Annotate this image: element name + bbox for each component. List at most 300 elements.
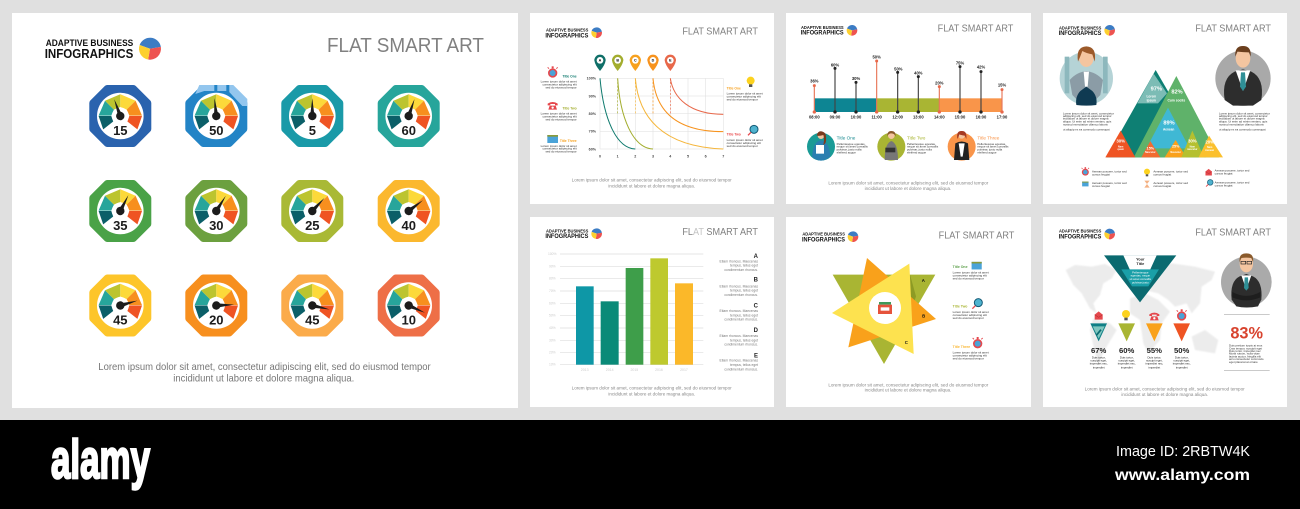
pyramid chart: Nascetur [1170, 151, 1181, 154]
person: man with glasses [1221, 253, 1272, 307]
timeline chart: 14:00 [934, 114, 945, 119]
footer text: Lorem ipsum dolor sit amet, consectetur adipiscing elit, sed do eiusmod tempor [98, 361, 431, 373]
funnel title: Title [1136, 262, 1144, 266]
legend [1082, 167, 1250, 188]
side text: Title Three [953, 345, 970, 349]
legend: Aenean posuere, tortor sed [1092, 181, 1127, 185]
left text block: Lorem ipsum dolor sit amet, consectetur [1063, 111, 1114, 115]
pyramid chart: quam [1117, 148, 1125, 151]
timeline chart: 50% [873, 55, 881, 60]
left text blocks [541, 75, 577, 154]
person captions: eleifend augue [977, 150, 997, 154]
gauge 10 [381, 278, 436, 333]
pyramid chart: Nascetur [1145, 151, 1156, 154]
logo: INFOGRAPHICS [545, 33, 588, 39]
heading: FLAT SMART ART [682, 26, 758, 37]
line chart: 70% [589, 130, 597, 134]
pyramid chart: Aenean [1163, 127, 1174, 131]
timeline chart: 12:00 [892, 114, 904, 119]
metric 67%: suscipit eget, [1090, 358, 1107, 362]
metric 55%: imperdiet [1149, 365, 1160, 369]
logo [801, 25, 857, 37]
logo: INFOGRAPHICS [545, 234, 588, 240]
gauge 50 [189, 85, 247, 144]
line chart: 5 [687, 154, 689, 158]
pyramid chart: 20% [1205, 140, 1214, 145]
logo: ADAPTIVE BUSINESS [801, 25, 844, 30]
timeline chart [809, 55, 1008, 119]
icon: bulb [747, 77, 755, 87]
right text block: Lorem ipsum dolor sit amet, consectetur [1219, 111, 1270, 115]
world map [1066, 263, 1218, 363]
side text: consectetur adipiscing elit [953, 354, 987, 358]
right text block: adipiscing elit, sed do eiusmod tempor [1219, 114, 1268, 118]
funnel title: pulvinar justo [1132, 280, 1149, 284]
logo: INFOGRAPHICS [45, 47, 133, 61]
pyramid chart: 82% [1171, 90, 1183, 96]
side text: consectetur adipiscing elit [953, 274, 987, 278]
icon: bulb [1122, 310, 1130, 320]
legend text: B [754, 278, 759, 284]
side text: sed do eiusmod tempor [953, 277, 984, 281]
gauge 5 [285, 88, 340, 144]
heading: FLAT SMART ART [939, 230, 1014, 241]
legend text: D [754, 328, 759, 334]
legend text: condimentum rhoncus. [724, 268, 758, 272]
gauge 20 [189, 278, 244, 333]
funnel title [1104, 255, 1176, 302]
pin C: C [634, 59, 637, 63]
star diagram [832, 258, 936, 364]
metric 67%: Duis tortor, [1092, 355, 1106, 359]
bar chart: 100% [548, 252, 557, 256]
metric 83%: Duis tortor, imperdiet nec [1229, 349, 1261, 353]
legend text: Etiam rhoncus. Maecenas [720, 259, 758, 263]
metric 83% [1224, 315, 1270, 370]
footer text: Lorem ipsum dolor sit amet, consectetur adipiscing elit, sed do eiusmod tempor [1085, 386, 1245, 392]
icon: magnifier [972, 299, 982, 309]
logo: INFOGRAPHICS [1059, 234, 1101, 240]
gauge 35 [93, 184, 148, 238]
metric 83%: Morbi rutrum, nulla vitae [1229, 352, 1260, 356]
metric 60%: Duis tortor, [1120, 355, 1134, 359]
person three [948, 131, 976, 161]
bar chart: 10% [549, 363, 556, 367]
funnel title: sit amet convallis [1130, 277, 1152, 281]
legend text: A [754, 254, 759, 260]
legend text: condimentum rhoncus. [724, 293, 758, 297]
image id: Image ID: 2RBTW4K [1116, 443, 1250, 460]
legend: Aenean posuere, tortor sed [1092, 169, 1127, 173]
metric 67%: imperdiet nec, [1090, 361, 1108, 365]
gauge 60: 60 [401, 123, 416, 138]
gauge 45 orange: 45 [305, 312, 320, 328]
pin E [665, 55, 676, 71]
side text: sed do eiusmod tempor [953, 357, 984, 361]
funnel title: Your [1136, 257, 1145, 261]
metric 67%: 67% [1091, 346, 1107, 355]
right text blocks: consectetur adipiscing elit [727, 95, 761, 99]
timeline chart: 30% [852, 76, 860, 81]
footer text [572, 386, 732, 398]
pyramid chart: Nam [1190, 145, 1196, 148]
pyramid chart: 25% [1172, 145, 1180, 149]
person captions: pulvinar, justo nulla [977, 148, 1003, 152]
footer text [828, 180, 989, 192]
legend text [720, 254, 759, 371]
bar chart: 2014 [606, 368, 614, 372]
bar chart: 60% [549, 301, 556, 305]
metric 55%: suscipit eget, [1146, 358, 1163, 362]
legend text: E [754, 354, 758, 360]
metric 83%: lacinia auctor, fringilla elit [1229, 354, 1261, 358]
logo [1059, 229, 1115, 240]
bar chart: 2013 [581, 368, 589, 372]
legend text: tempus, tellus eget [730, 363, 758, 367]
bar chart: 80% [549, 277, 556, 281]
pyramid chart: nascetur [1187, 148, 1198, 151]
bar chart: 2015 [630, 368, 638, 372]
person captions: Pellentesque egestas, [907, 142, 936, 146]
right text block [1219, 111, 1270, 131]
pyramid chart: Nam [1207, 146, 1213, 149]
panel: world map percentages [1043, 217, 1287, 407]
person captions [837, 135, 1009, 154]
gauge 40 [381, 184, 436, 238]
pyramid chart: 15% [1147, 146, 1155, 150]
person captions: Pellentesque egestas, [977, 142, 1006, 146]
panel: pyramids [1043, 13, 1287, 204]
person captions: Title One [837, 135, 856, 140]
metric 50% [1173, 323, 1191, 369]
left text blocks: Title Two [563, 107, 577, 111]
person captions: Title Three [977, 135, 1000, 140]
panel: bar chart [530, 217, 774, 407]
metric 50%: imperdiet nec, [1173, 361, 1191, 365]
footer text: Lorem ipsum dolor sit amet, consectetur adipiscing elit, sed do eiusmod tempor [572, 178, 732, 184]
gauge 25: 25 [305, 218, 320, 233]
left text blocks: consectetur adipiscing elit [542, 147, 577, 151]
star diagram: A [922, 278, 926, 283]
icon: window [547, 135, 558, 143]
bar chart: 2017 [680, 368, 688, 372]
side text: consectetur adipiscing elit [953, 313, 987, 317]
pin E: E [669, 59, 672, 63]
metric 55%: 55% [1147, 346, 1162, 355]
funnel title: Pellentesque [1132, 270, 1149, 274]
icon: stopwatch [973, 337, 983, 348]
pyramid chart: Lorem [1147, 94, 1156, 98]
line chart: 4 [669, 154, 672, 158]
person captions: Pellentesque egestas, [837, 142, 866, 146]
left text blocks: sed do eiusmod tempor [545, 85, 577, 89]
gauge 30 [189, 184, 244, 238]
timeline chart: 13:00 [913, 114, 924, 119]
funnel title: egestas, neque [1131, 274, 1150, 278]
timeline chart: 08:00 [809, 114, 820, 119]
legend: cursus feugiat [1215, 183, 1233, 187]
left text block [1063, 111, 1114, 131]
right text blocks: sed do eiusmod tempor [727, 144, 758, 148]
metric 60%: 60% [1119, 346, 1135, 355]
pin A: A [599, 59, 602, 63]
bar chart: 30% [549, 338, 556, 342]
panel: timeline [786, 13, 1031, 204]
line chart: 80% [589, 112, 597, 116]
metric 83%: eget placerat at ornare [1229, 360, 1258, 364]
person captions: neque sit amet convallis [907, 145, 939, 149]
side text: sed do eiusmod tempor [953, 316, 984, 320]
side text: Title Two [953, 304, 967, 308]
right text block: aliqua. Ut enim ad minim veniam, quis [1219, 120, 1268, 124]
timeline chart: 42% [977, 65, 985, 70]
metric 83%: arcu consectetur commodo [1229, 357, 1264, 361]
logo: ADAPTIVE BUSINESS [46, 38, 133, 49]
icon: phone [1149, 313, 1159, 320]
metric 50%: 50% [1174, 346, 1190, 355]
gauge 25 [285, 184, 340, 238]
line chart: 7 [722, 154, 724, 158]
legend: cursus feugiat [1153, 172, 1171, 176]
pyramid chart: 89% [1163, 121, 1175, 127]
metric 67%: imperdiet [1093, 365, 1105, 369]
person captions: pulvinar, justo nulla [837, 148, 862, 152]
footer text: incididunt ut labore et dolore magna aliqua. [865, 388, 951, 394]
right text blocks: Title Two [727, 133, 741, 137]
footer text [1085, 386, 1245, 398]
pyramid chart: ipsum [1147, 99, 1156, 103]
footer text [572, 178, 732, 189]
side text: Title One [953, 265, 968, 269]
legend: cursus feugiat [1153, 184, 1171, 188]
bar chart: 70% [549, 289, 556, 293]
legend text: condimentum rhoncus. [724, 367, 758, 371]
legend text: C [754, 303, 759, 309]
logo: INFOGRAPHICS [1059, 31, 1101, 37]
line chart: 0 [599, 154, 601, 158]
logo: ADAPTIVE BUSINESS [1059, 25, 1101, 30]
heading: FLAT SMART ART [1195, 227, 1271, 238]
person one [807, 131, 835, 161]
timeline chart: 75% [956, 60, 964, 65]
legend: cursus feugiat [1215, 172, 1233, 176]
gauge 35: 35 [113, 218, 128, 233]
side text: Lorem ipsum dolor sit amet [953, 351, 989, 355]
pyramid chart: 30% [1188, 138, 1197, 143]
legend text: Etiam rhoncus. Maecenas [720, 284, 758, 288]
metric 50%: imperdiet [1176, 365, 1188, 369]
timeline chart: 10:00 [851, 114, 862, 119]
legend: Aenean posuere, tortor sed [1153, 169, 1188, 173]
logo [1059, 25, 1115, 37]
person captions: neque sit amet convallis [977, 145, 1009, 149]
footer text: Lorem ipsum dolor sit amet, consectetur adipiscing elit, sed do eiusmod tempor [828, 180, 989, 186]
legend: Aenean posuere, tortor sed [1215, 180, 1250, 184]
gauge 45 yellow [93, 278, 148, 333]
logo [802, 231, 858, 243]
line chart: 100% [587, 77, 597, 81]
legend text: tempus, tellus eget [730, 289, 758, 293]
heading: FLAT SMART ART [1195, 24, 1271, 35]
left text blocks: sed do eiusmod tempor [545, 117, 577, 121]
icon: stopwatch [1177, 309, 1187, 321]
metric 60% [1118, 323, 1136, 369]
icon: magnifier [748, 125, 758, 135]
bar chart: 40% [549, 326, 556, 330]
icon: stopwatch [548, 66, 558, 78]
timeline chart: 11:00 [871, 114, 883, 119]
side text: Lorem ipsum dolor sit amet [953, 310, 989, 314]
pyramid chart: Cum sociis [1167, 99, 1185, 103]
logo [545, 228, 602, 240]
line chart: 3 [652, 154, 654, 158]
right text blocks: consectetur adipiscing elit [727, 141, 761, 145]
pyramid chart: 30% [1116, 138, 1125, 143]
icon: cash register [878, 302, 892, 314]
right text blocks: Lorem ipsum dolor sit amet [727, 138, 763, 142]
legend: cursus feugiat [1092, 184, 1110, 188]
left text block: ut aliquip ex ea commodo consequat [1063, 127, 1110, 131]
left text blocks: Lorem ipsum dolor sit amet [541, 80, 577, 84]
person captions: neque sit amet convallis [837, 145, 868, 149]
metric 50%: suscipit eget, [1173, 358, 1190, 362]
logo: ADAPTIVE BUSINESS [546, 228, 588, 233]
panel: decay curves [530, 13, 774, 204]
gauge 60 [381, 88, 436, 144]
gauge 30: 30 [209, 218, 224, 233]
person captions: Title Two [907, 135, 926, 140]
pin C [630, 55, 641, 71]
legend: Aenean posuere, tortor sed [1215, 169, 1250, 173]
pin B [612, 55, 623, 71]
line chart [587, 77, 724, 158]
metric 55% [1145, 323, 1163, 369]
alamy logo: alamy [51, 428, 150, 490]
left text blocks: consectetur adipiscing elit [542, 114, 577, 118]
bar chart: 2016 [655, 368, 663, 372]
bar chart: 50% [549, 314, 556, 318]
bar chart: 90% [549, 264, 556, 268]
timeline chart: 40% [914, 70, 923, 75]
person: woman [1060, 46, 1113, 106]
timeline chart: 15% [998, 83, 1006, 88]
left text block: aliqua. Ut enim ad minim veniam, quis [1063, 120, 1112, 124]
panel: gauges [12, 13, 518, 408]
stock footer band [0, 420, 1300, 509]
logo: ADAPTIVE BUSINESS [546, 28, 588, 33]
metric 83%: 83% [1230, 324, 1263, 343]
person captions: eleifend augue [907, 150, 927, 154]
legend text: condimentum rhoncus. [724, 343, 758, 347]
left text blocks: Lorem ipsum dolor sit amet [541, 112, 577, 116]
timeline chart: 16:00 [976, 114, 987, 119]
right text blocks: Title One [727, 86, 741, 90]
metric 55%: imperdiet nec, [1145, 361, 1163, 365]
legend: cursus feugiat [1092, 172, 1110, 176]
pyramid chart: Nam [1118, 145, 1124, 148]
gauge 50: 50 [209, 123, 224, 138]
line chart: 2 [634, 154, 636, 158]
panel: star triangles [786, 217, 1031, 407]
metric 60%: imperdiet [1121, 365, 1133, 369]
logo: INFOGRAPHICS [802, 237, 845, 243]
line chart: 90% [589, 94, 597, 98]
pin B: B [616, 59, 619, 63]
footer text [98, 361, 431, 384]
pin D: D [652, 59, 655, 63]
footer text: Lorem ipsum dolor sit amet, consectetur adipiscing elit, sed do eiusmod tempor [572, 386, 732, 392]
metric 60%: suscipit eget, [1118, 358, 1135, 362]
footer text: incididunt ut labore et dolore magna aliqua. [865, 186, 951, 192]
site url: www.alamy.com [1114, 467, 1250, 484]
gauge 45 yellow: 45 [113, 312, 128, 328]
gauge 45 orange [285, 278, 340, 333]
footer text: incididunt ut labore et dolore magna aliqua. [608, 392, 695, 398]
legend text: tempus, tellus eget [730, 264, 758, 268]
footer text: Lorem ipsum dolor sit amet, consectetur adipiscing elit, sed do eiusmod tempor [828, 382, 989, 388]
gauge 15: 15 [113, 123, 128, 138]
legend text: condimentum rhoncus. [724, 318, 758, 322]
gauge 40: 40 [401, 218, 416, 233]
left text block: incididunt ut labore et dolore magna [1063, 117, 1109, 121]
logo: ADAPTIVE BUSINESS [802, 232, 845, 237]
line chart: 6 [705, 154, 707, 158]
legend text: Etiam rhoncus. Maecenas [720, 359, 758, 363]
logo: ADAPTIVE BUSINESS [1059, 229, 1101, 234]
left text blocks: Lorem ipsum dolor sit amet [541, 144, 577, 148]
footer text: incididunt ut labore et dolore magna aliqua. [173, 372, 354, 384]
bar chart: 20% [549, 351, 556, 355]
left text blocks: Title Three [560, 139, 577, 143]
metric 50%: Duis tortor, [1175, 355, 1189, 359]
icon: mail [1095, 311, 1103, 320]
metric 83%: Cras tempor, suscipit eget [1229, 346, 1262, 350]
legend text: tempus, tellus eget [730, 313, 758, 317]
person captions: eleifend augue [837, 150, 856, 154]
timeline chart: 60% [831, 63, 839, 68]
timeline chart: 17:00 [997, 114, 1008, 119]
left text block: adipiscing elit, sed do eiusmod tempor [1063, 114, 1112, 118]
legend text: Etiam rhoncus. Maecenas [720, 309, 758, 313]
legend text: tempus, tellus eget [730, 338, 758, 342]
pin D [647, 55, 659, 71]
star diagram: C [905, 340, 908, 345]
metric 55%: Duis tortor, [1147, 355, 1161, 359]
line chart: 60% [589, 147, 597, 151]
logo: INFOGRAPHICS [801, 31, 844, 37]
logo [45, 38, 161, 61]
left text blocks: sed do eiusmod tempor [545, 150, 577, 154]
person: man [1215, 46, 1271, 106]
gauge 10: 10 [401, 312, 416, 328]
left text blocks: Title One [562, 75, 577, 79]
metric 60%: imperdiet nec, [1118, 361, 1136, 365]
gauge 15 [93, 88, 148, 144]
footer text: incididunt ut labore et dolore magna aliqua. [1121, 392, 1208, 398]
metric 67% [1090, 323, 1108, 369]
right text block: nostrud exercitation ullamco laboris [1219, 122, 1264, 126]
metric 83%: Duis pretium turpis at eros [1229, 344, 1263, 348]
footer text: incididunt ut labore et dolore magna aliqua. [608, 183, 695, 189]
timeline chart: 20% [935, 80, 944, 85]
right text blocks [727, 86, 763, 148]
left text block: nostrud exercitation ullamco laboris [1063, 122, 1108, 126]
pyramid chart: 97% [1151, 86, 1162, 92]
gauge 20: 20 [209, 312, 224, 328]
side text: Lorem ipsum dolor sit amet [953, 271, 989, 275]
gauge 5: 5 [309, 123, 316, 138]
timeline chart: 09:00 [830, 114, 841, 119]
